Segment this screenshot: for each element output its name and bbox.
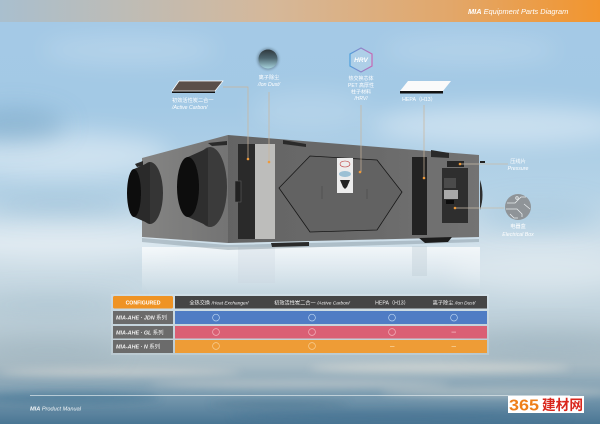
HRV label: 热交换芯体 xyxy=(348,75,374,82)
row: GL series: MIA-AHE · GL 系列 xyxy=(116,328,164,336)
watermark logo: 365 xyxy=(509,398,539,414)
configured header cell xyxy=(113,296,173,308)
footer rule xyxy=(30,394,570,397)
ion dust callout xyxy=(257,48,281,88)
device reflection xyxy=(142,246,480,293)
pressure plate xyxy=(447,161,464,167)
row: N series: MIA-AHE · N 系列 xyxy=(116,343,160,351)
watermark logo xyxy=(508,396,584,414)
pressure plate label: 压线片 xyxy=(510,157,526,165)
leader dots xyxy=(247,158,461,209)
white ion dust panel xyxy=(255,144,275,239)
watermark logo: 建材网 xyxy=(542,397,583,413)
black filter door left xyxy=(238,144,255,239)
electrical box label: 电器盒 xyxy=(510,222,527,230)
ion dust label: /Ion Dust/ xyxy=(257,82,281,88)
column headers: 初效活性炭二合一 /Active Carbon/ xyxy=(274,300,350,306)
electrical box label: Electrical Box xyxy=(502,232,534,238)
electrical box callout xyxy=(502,194,534,238)
left duct xyxy=(127,162,163,224)
HEPA label: HEPA（H13） xyxy=(402,96,436,103)
column headers: HEPA（H13） xyxy=(375,299,409,306)
hexagonal heat exchanger outline xyxy=(279,156,402,232)
electrical box xyxy=(442,168,468,223)
unit side face xyxy=(142,135,228,243)
configuration table xyxy=(111,294,489,355)
ventilation unit xyxy=(127,135,485,250)
black filter door right xyxy=(412,157,427,235)
column headers xyxy=(175,296,487,308)
unit front face xyxy=(228,135,479,243)
configured header cell: CONFIGURED xyxy=(126,300,161,306)
foot xyxy=(419,237,452,243)
unit shadow xyxy=(142,238,479,250)
icon: carbon filter xyxy=(172,81,223,93)
header bar xyxy=(0,0,600,22)
icon: ion sphere xyxy=(257,48,279,70)
pressure plate label: Pressure xyxy=(508,166,528,172)
HRV label: 柱子材料 xyxy=(351,88,371,96)
HRV label: PET 高厚性 xyxy=(348,82,374,89)
HRV label: /HRV/ xyxy=(353,96,368,102)
HEPA filter callout xyxy=(400,81,451,103)
icon: circuit disc xyxy=(505,194,531,220)
table translucent backing xyxy=(111,294,489,355)
row: JDN series: MIA-AHE · JDN 系列 xyxy=(116,314,167,322)
row: GL series xyxy=(113,326,487,338)
column headers: 离子除尘 /Ion Dust/ xyxy=(433,300,475,306)
icon: HEPA filter xyxy=(400,81,451,94)
door latch xyxy=(235,181,241,202)
footer text: MIA Product Manual xyxy=(30,406,82,412)
product label sticker xyxy=(337,158,353,193)
title: MIA Equipment Parts Diagram xyxy=(468,7,568,16)
activated carbon filter callout xyxy=(171,81,223,111)
column headers: 全热交换 /Heat Exchanger/ xyxy=(189,300,249,306)
centre duct xyxy=(177,147,227,227)
rear right duct xyxy=(480,180,482,210)
carbon filter label: /Active Carbon/ xyxy=(171,105,208,111)
top mounting brackets xyxy=(135,140,449,247)
row: N series xyxy=(113,340,487,353)
leader lines xyxy=(223,87,508,208)
ion dust label: 离子除尘 xyxy=(259,73,279,81)
HRV core callout xyxy=(348,48,374,102)
icon: HRV hexagon: HRV xyxy=(354,57,369,64)
carbon filter label: 初效活性炭二合一 xyxy=(172,96,214,104)
hexagon seams xyxy=(322,186,367,199)
row: JDN series xyxy=(113,311,487,324)
